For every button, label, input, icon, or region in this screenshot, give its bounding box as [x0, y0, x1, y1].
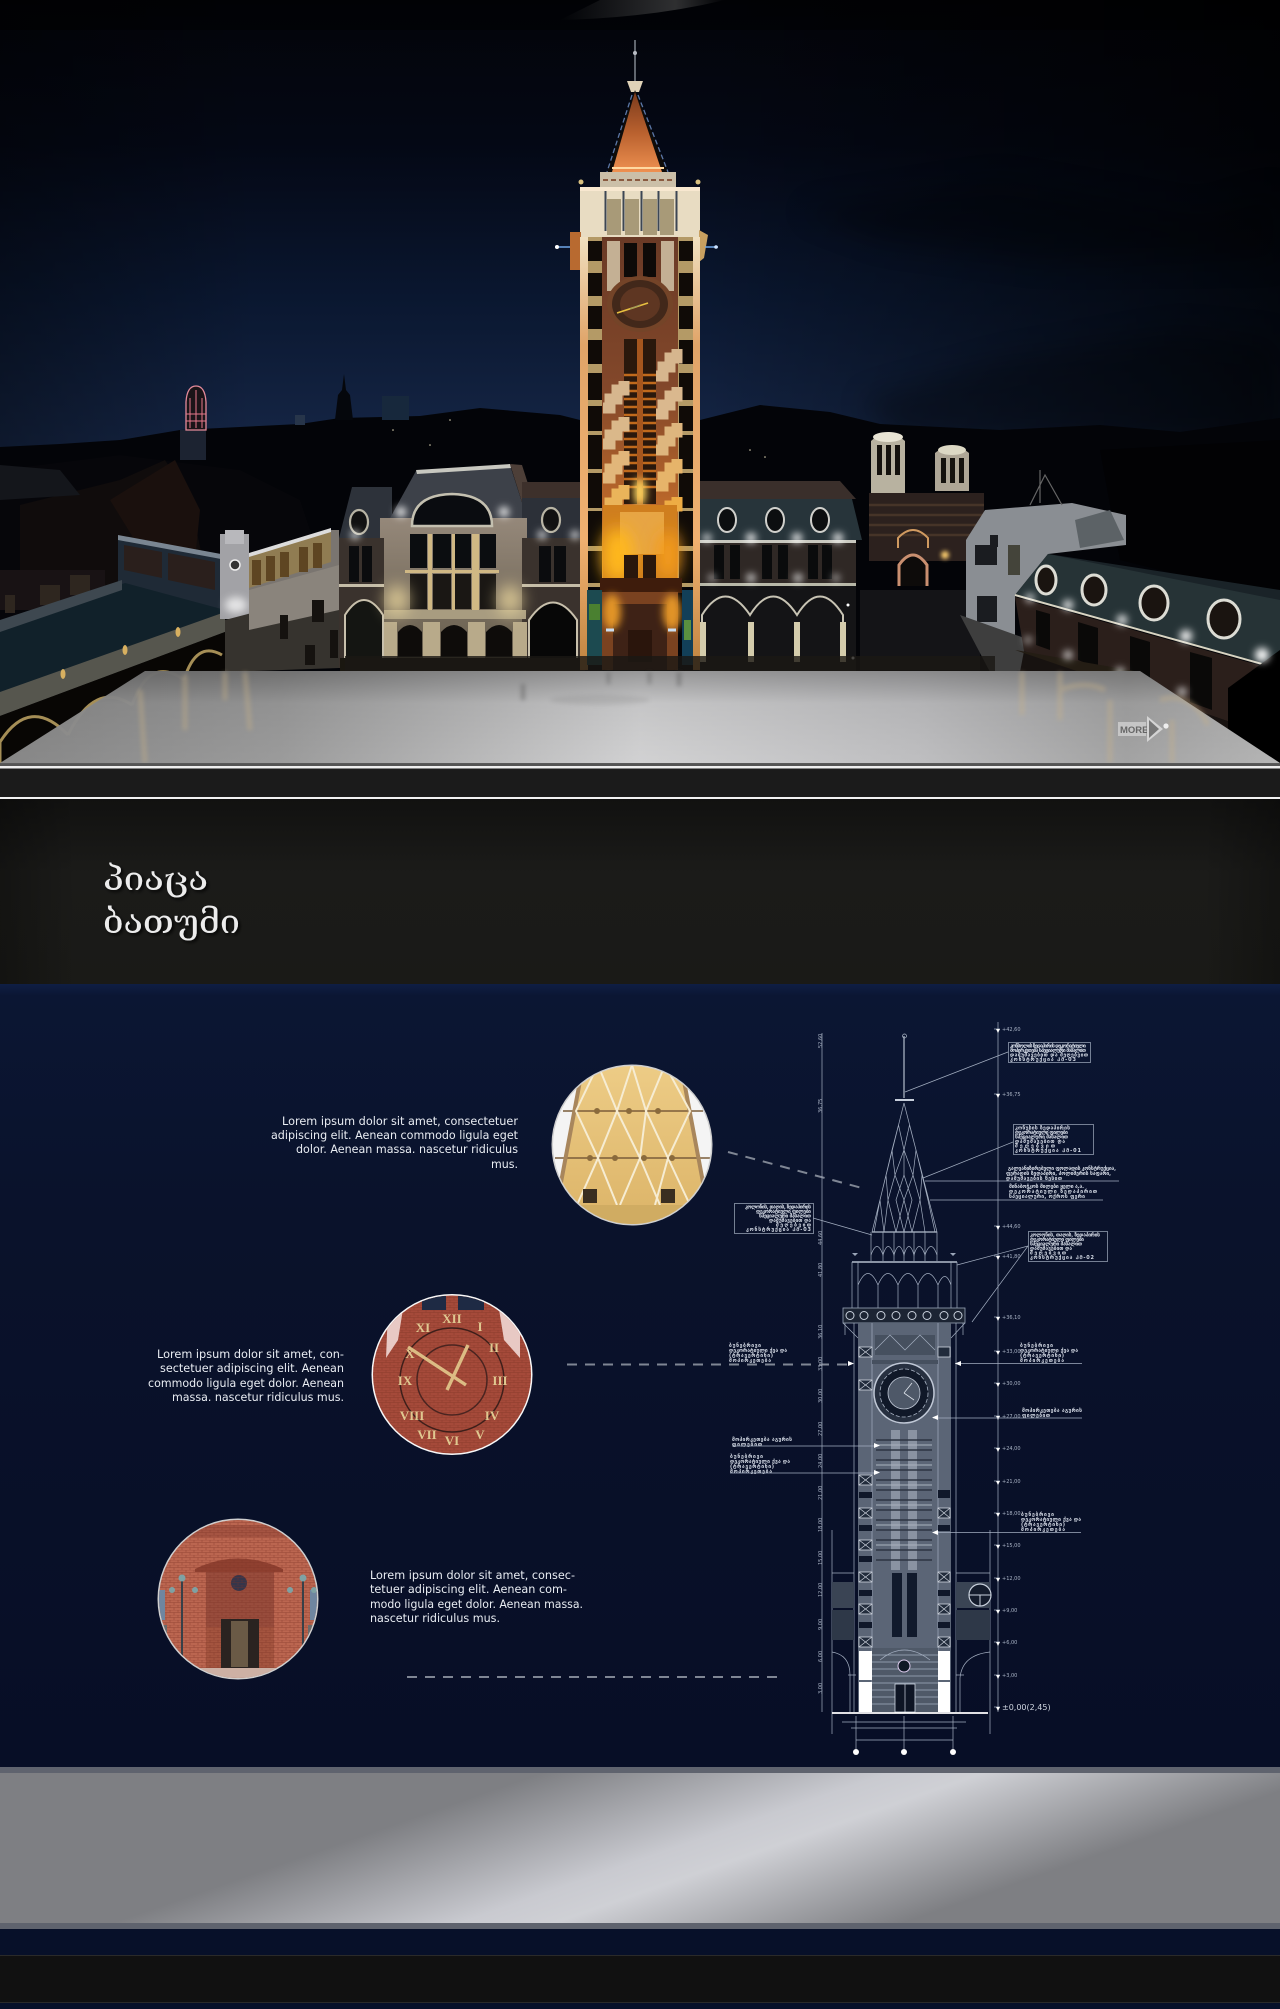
annotation A: კონსოლის ზედაპირის დეკორატიული — [1010, 1042, 1086, 1050]
annotation A: დამუშავებით და შეღებვით — [1010, 1052, 1088, 1058]
text block 2: sectetuer adipiscing elit. Aenean — [160, 1361, 344, 1375]
spire notes: დამუშავების წესით — [1006, 1176, 1062, 1182]
side wings — [832, 1530, 991, 1734]
right shaft notes: მოპირკეთება — [1020, 1357, 1064, 1364]
ground line and dimensions — [832, 1713, 988, 1755]
annotation D: კოლონის, თაღის, ზედაპირის — [1030, 1232, 1100, 1238]
right shaft notes: დეკორატიული ქვა და — [1020, 1347, 1078, 1354]
annotation B — [1014, 1124, 1094, 1154]
rotated left labels: 36,10 — [818, 1325, 824, 1339]
text block 2 — [148, 1347, 344, 1404]
text block 2: Lorem ipsum dolor sit amet, con- — [157, 1347, 344, 1361]
roman numerals: VII — [417, 1427, 437, 1442]
rotated left labels: 27,00 — [818, 1422, 824, 1436]
text block 3: nascetur ridiculus mus. — [370, 1611, 500, 1625]
left shaft notes: დეკორატიული ქვა და — [729, 1347, 787, 1354]
rotated left labels: 33,00 — [818, 1357, 824, 1371]
spire notes: გალვანიზირებული ფოლადის კონსტრუქცია, — [1008, 1165, 1116, 1172]
white base panels — [859, 1651, 950, 1712]
boxed panels along shaft — [859, 1347, 950, 1647]
right shaft notes: ბუნებრივი — [1020, 1342, 1053, 1349]
level labels: +3,00 — [1002, 1673, 1017, 1679]
left shaft notes: მოპირკეთება — [730, 1468, 772, 1475]
spire roof — [607, 90, 668, 172]
level labels: +30,00 — [1002, 1381, 1021, 1387]
text block 3 — [370, 1568, 583, 1625]
roman numerals: III — [492, 1373, 508, 1388]
rotated left labels: 44,60 — [818, 1231, 824, 1245]
annotation D — [1028, 1232, 1108, 1262]
plaza ground strip — [345, 656, 995, 672]
annotation B: სპეციალური მასალით — [1015, 1134, 1068, 1140]
annotation D: კონსტრუქცია ᲙᲛ-02 — [1030, 1254, 1095, 1261]
silver band — [0, 1767, 1280, 1929]
annotation C: კონსტრუქცია ᲙᲛ-03 — [746, 1226, 812, 1233]
clock face — [610, 276, 670, 328]
annotation A: კონსტრუქცია ᲙᲛ-03 — [1010, 1056, 1077, 1063]
level labels — [1002, 1027, 1051, 1712]
left shaft notes — [729, 1342, 878, 1475]
text block 1: adipiscing elit. Aenean commodo ligula eget — [271, 1128, 518, 1142]
level labels: +33,00 — [1002, 1349, 1021, 1355]
right shaft notes: დეკორატიული ქვა და — [1021, 1516, 1081, 1523]
annotation C: შეღებვით — [776, 1222, 811, 1228]
left terrace with arches — [0, 535, 225, 770]
right shaft notes: (ტრავერტინი) — [1021, 1521, 1065, 1528]
shaft — [580, 237, 700, 670]
illuminated clock tower — [555, 40, 718, 670]
level labels: +6,00 — [1002, 1640, 1017, 1646]
annotation A: მოპირკეთება სპეციალური მასალით — [1010, 1047, 1086, 1054]
left annex building — [220, 528, 339, 672]
rotated left labels: 3,00 — [818, 1683, 824, 1694]
entrance — [872, 1648, 938, 1712]
level labels: +9,00 — [1002, 1608, 1017, 1614]
right foreground mansard building — [1014, 554, 1280, 729]
roman numerals — [398, 1311, 508, 1448]
text block 1: Lorem ipsum dolor sit amet, consectetuer — [282, 1114, 518, 1128]
roman numerals: IX — [398, 1373, 413, 1388]
text block 3: tetuer adipiscing elit. Aenean com- — [370, 1582, 567, 1596]
level labels: +42,60 — [1002, 1027, 1021, 1033]
mast and finial — [627, 40, 643, 92]
annotation C: სპეციალური მასალით — [759, 1212, 811, 1220]
roman numerals: IV — [485, 1408, 500, 1423]
title — [103, 859, 240, 941]
left shaft notes: დეკორატიული ქვა და — [730, 1458, 790, 1465]
bottom navy strip — [0, 1929, 1280, 2009]
dark windows — [892, 1573, 917, 1637]
left shaft notes: ფილებით — [732, 1442, 762, 1448]
level labels: +36,75 — [1002, 1092, 1021, 1098]
rotated left labels: 9,00 — [818, 1619, 824, 1630]
annotation B: კონუსის ზედაპირის — [1015, 1124, 1070, 1132]
text block 1 — [271, 1114, 518, 1171]
upper belfry sections — [852, 1232, 957, 1308]
spire notes: ფერადის ზედაპირი, პოლიმერის საფარი, — [1006, 1170, 1111, 1177]
annotation D: სპეციალური მასალით — [1030, 1240, 1082, 1248]
rotated left labels: 21,00 — [818, 1486, 824, 1500]
dark title header — [0, 799, 1280, 984]
right shaft notes: მოპირკეთება აგურის — [1022, 1407, 1082, 1414]
more button — [1118, 716, 1169, 742]
church with two towers — [860, 432, 984, 670]
central slatted slot — [624, 339, 656, 506]
arrowheads — [848, 1361, 961, 1535]
annotation B: შეღებვით — [1015, 1144, 1055, 1150]
reflected people — [521, 672, 681, 705]
parapet and belfry — [555, 172, 718, 270]
dashed leader lines — [407, 1152, 862, 1677]
left shaft notes: ბუნებრივი — [729, 1342, 761, 1349]
left shaft notes: მოპირკეთება აგურის — [732, 1436, 792, 1443]
rotated left labels: 6,00 — [818, 1651, 824, 1662]
annotation B: დეკორატიული ფილები — [1015, 1129, 1068, 1136]
tower shaft — [854, 1323, 956, 1712]
roman numerals: II — [489, 1340, 499, 1355]
right shaft notes: ბუნებრივი — [1021, 1511, 1054, 1518]
spire notes: დეკორატიული ზედაპირით — [1009, 1188, 1097, 1195]
level labels: +36,10 — [1002, 1315, 1021, 1321]
more button: MORE — [1120, 725, 1148, 736]
annotation D: შეღებვით — [1030, 1250, 1066, 1256]
level labels: +21,00 — [1002, 1479, 1021, 1485]
spire and mast — [872, 1034, 937, 1232]
annotation D: დეკორატიული ფილები — [1030, 1236, 1084, 1243]
distant red-lit tower and spire — [180, 374, 409, 460]
free annotations — [729, 1165, 1119, 1535]
level labels: +18,00 — [1002, 1511, 1021, 1517]
spire notes — [925, 1165, 1119, 1200]
night sky — [0, 0, 1280, 480]
annotation A — [1008, 1042, 1090, 1063]
title: პიაცა — [103, 859, 208, 898]
roman numerals: VI — [445, 1433, 459, 1448]
stepped zigzag pattern — [603, 349, 677, 524]
rotated left labels: 30,00 — [818, 1389, 824, 1403]
separator band — [0, 764, 1280, 799]
annotation B: დამუშავებით და — [1015, 1139, 1065, 1145]
annotation C — [734, 1204, 814, 1234]
level labels: ±0,00(2,45) — [1002, 1703, 1051, 1712]
left shaft notes: ბუნებრივი — [730, 1453, 763, 1460]
rotated left labels: 36,75 — [818, 1099, 824, 1113]
circle: brick clock detail — [370, 1293, 535, 1458]
navy blueprint section — [0, 984, 1280, 1767]
annotation B: კონსტრუქცია ᲙᲛ-01 — [1015, 1147, 1082, 1154]
striped central columns — [876, 1430, 932, 1570]
roman numerals: VIII — [400, 1408, 424, 1423]
blueprint clock — [874, 1363, 934, 1423]
rotated left labels: 41,80 — [818, 1263, 824, 1277]
level labels: +24,00 — [1002, 1446, 1021, 1452]
roman numerals: XII — [442, 1311, 462, 1326]
roman numerals: V — [475, 1427, 485, 1442]
text block 1: dolor. Aenean massa. nascetur ridiculus — [296, 1142, 518, 1156]
level labels: +27,00 — [1002, 1414, 1021, 1420]
rotated left labels — [818, 1034, 824, 1694]
level labels: +41,80 — [1002, 1254, 1021, 1260]
central-left grand building — [339, 464, 585, 672]
rotated left labels: 52,60 — [818, 1034, 824, 1048]
roman numerals: XI — [416, 1320, 430, 1335]
white building on the right — [960, 470, 1126, 672]
reflected arches and columns — [140, 672, 1208, 763]
distant city silhouette — [0, 405, 1280, 671]
balcony row — [843, 1308, 965, 1338]
dimension axes — [822, 1022, 1000, 1712]
rotated left labels: 12,00 — [818, 1583, 824, 1597]
text block 2: commodo ligula eget dolor. Aenean — [148, 1376, 344, 1390]
text block 1: mus. — [491, 1157, 518, 1171]
architectural blueprint of the tower — [729, 1022, 1119, 1755]
right shaft notes: მოპირკეთება — [1021, 1526, 1065, 1533]
roman numerals: X — [405, 1346, 415, 1361]
annotation C: დეკორატიული ფილები — [756, 1208, 811, 1215]
rotated left labels: 15,00 — [818, 1551, 824, 1565]
footer dark bar — [0, 1955, 1280, 2003]
left shaft notes: მოპირკეთება — [729, 1357, 771, 1364]
level labels: +12,00 — [1002, 1576, 1021, 1582]
left shaft notes: (ტრავერტინი) — [730, 1463, 774, 1470]
roman numerals: I — [477, 1319, 483, 1334]
spire notes: სპეციალური, ოქროს ფერი — [1009, 1193, 1085, 1200]
annotation C: დამუშავებით და — [769, 1218, 811, 1224]
circle: spire lattice detail — [550, 1064, 715, 1230]
level labels: +15,00 — [1002, 1543, 1021, 1549]
rotated left labels: 18,00 — [818, 1518, 824, 1532]
text block 3: modo ligula eget dolor. Aenean massa. — [370, 1597, 583, 1611]
glowing lower panel — [602, 505, 680, 585]
annotation C: კოლონის, თაღის, ზედაპირის — [745, 1204, 811, 1210]
text block 3: Lorem ipsum dolor sit amet, consec- — [370, 1568, 575, 1582]
glass reflection panel — [0, 671, 1280, 765]
annotation D: დამუშავებით და — [1030, 1246, 1072, 1252]
left shaft notes: (ტრავერტინი) — [729, 1352, 773, 1359]
hero night photo of the plaza — [0, 0, 1280, 780]
spire notes: მინაბოჭკოს მილები ყელი ა.ა. — [1009, 1184, 1084, 1190]
entrance and stained glass — [587, 578, 693, 670]
rotated left labels: 24,00 — [818, 1454, 824, 1468]
right shaft notes: (ტრავერტინი) — [1020, 1352, 1064, 1359]
level labels: +44,60 — [1002, 1224, 1021, 1230]
right wing of plaza — [699, 481, 862, 674]
circle: brick entrance detail — [155, 1518, 320, 1683]
title: ბათუმი — [103, 902, 240, 941]
right shaft notes: ფილებით — [1022, 1413, 1050, 1419]
text block 2: massa. nascetur ridiculus mus. — [172, 1390, 344, 1404]
right shaft notes — [933, 1342, 1082, 1533]
annotation boxes — [734, 1042, 1108, 1322]
